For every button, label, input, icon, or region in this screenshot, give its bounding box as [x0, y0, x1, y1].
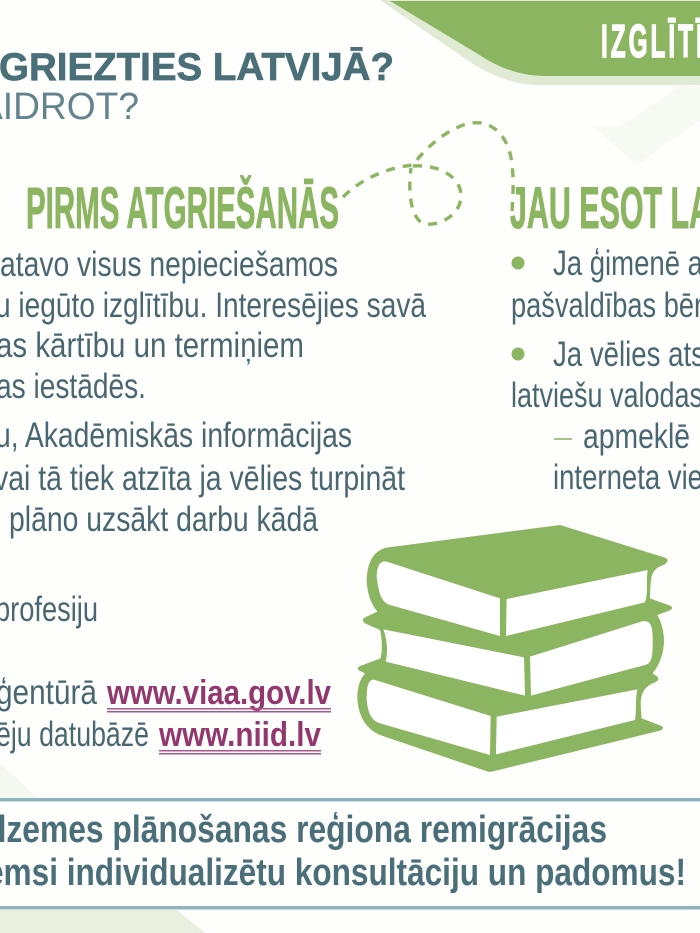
paragraph 1: u iegūto izglītību. Interesējies savā [0, 286, 426, 325]
faint decorative shape top right [592, 85, 700, 165]
bullet 1 text [511, 244, 700, 325]
paragraph 1: atavo visus nepieciešamos [0, 245, 338, 284]
right column text [511, 244, 700, 497]
left column text [0, 245, 426, 754]
link line: niid [0, 715, 321, 754]
dash marker [554, 438, 572, 440]
icon: stack of books [357, 525, 672, 772]
banner fill [390, 1, 700, 76]
link line: viaa: www.viaa.gov.lv [106, 674, 331, 712]
bullet 2 text [511, 335, 700, 415]
link line: niid: ēju datubāzē [0, 715, 149, 754]
paragraph 1: as kārtību un termiņiem [0, 326, 304, 365]
header banner [380, 0, 700, 85]
link line: niid: www.niid.lv [158, 716, 321, 754]
paragraph 2: u, Akadēmiskās informācijas [0, 416, 352, 455]
light green band bottom left [0, 910, 205, 933]
bullet 2 [512, 348, 524, 360]
sub item text [553, 417, 700, 497]
main title [0, 46, 394, 128]
bullet 1 [512, 256, 524, 270]
callout bottom rule [0, 906, 700, 910]
callout top rule [0, 798, 700, 802]
dashed path arrow [343, 123, 513, 224]
paragraph 1: as iestādēs. [0, 367, 146, 406]
title line 1: GRIEZTIES LATVIJĀ? [0, 46, 394, 89]
paragraph 2: plāno uzsākt darbu kādā [9, 500, 318, 539]
bottom callout [0, 798, 700, 910]
paragraph 2: vai tā tiek atzīta ja vēlies turpināt [0, 459, 405, 498]
faint triangle bottom left [0, 763, 38, 798]
paragraph 2 [0, 416, 405, 539]
link line: viaa [0, 673, 331, 712]
heading: before returning: PIRMS ATGRIEŠANĀS [26, 176, 339, 241]
banner shadow [380, 0, 700, 85]
paragraph 1 [0, 245, 426, 406]
